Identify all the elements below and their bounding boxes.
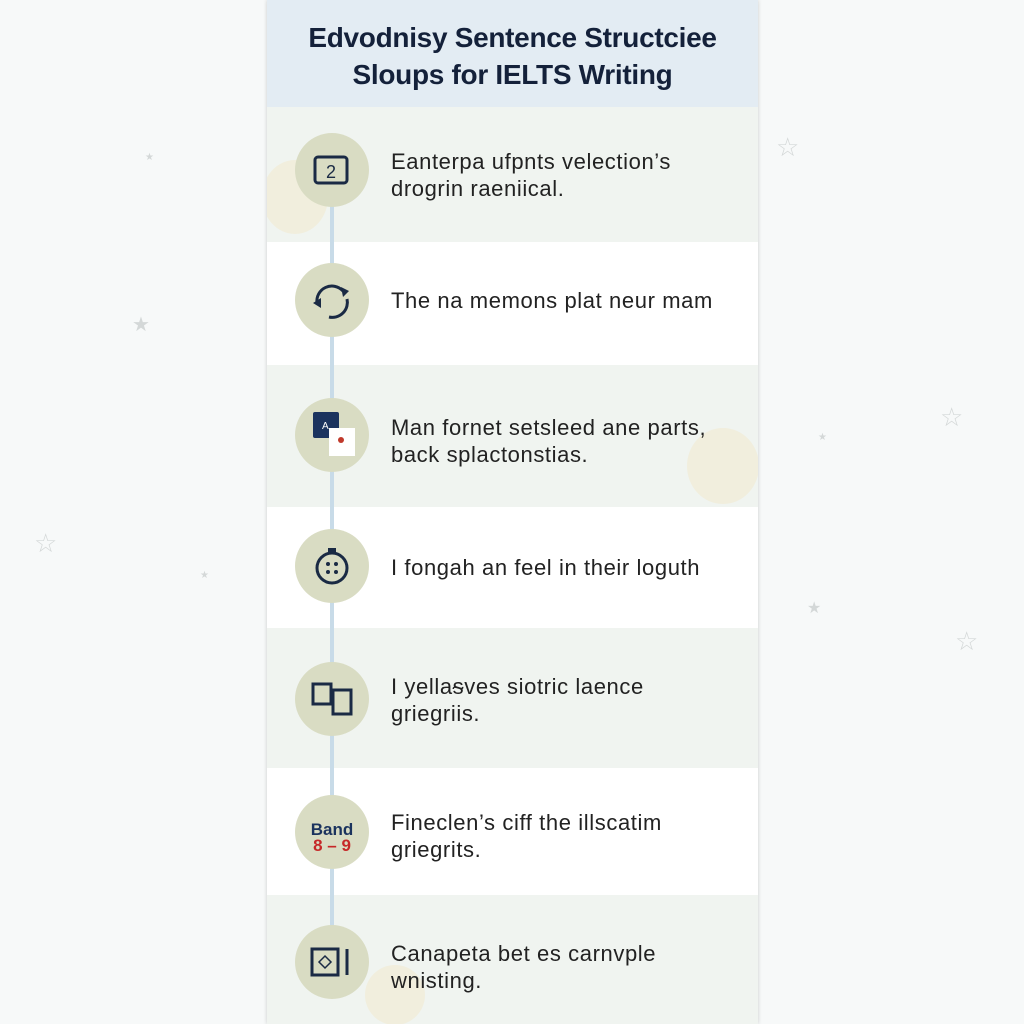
text: ☆ bbox=[940, 402, 963, 432]
text: ☆ bbox=[34, 528, 57, 558]
text 5: griegriis. bbox=[391, 701, 480, 726]
item 4 bbox=[295, 529, 700, 603]
text 6: Fineclen’s ciff the illscatim bbox=[391, 810, 662, 835]
text 6: griegrits. bbox=[391, 837, 481, 862]
text: ★ bbox=[807, 600, 821, 617]
icon: band 8-9: Band bbox=[311, 820, 353, 839]
item 5 bbox=[295, 662, 644, 736]
text 3 bbox=[391, 415, 706, 467]
text 1: drogrin raeniical. bbox=[391, 176, 564, 201]
text 1 bbox=[391, 149, 671, 201]
item 6 bbox=[295, 795, 662, 869]
text 7: wnisting. bbox=[391, 968, 482, 993]
text: ★ bbox=[200, 570, 209, 581]
icon: stopwatch bbox=[295, 529, 369, 603]
text 1: Eanterpa ufpnts velection’s bbox=[391, 149, 671, 174]
text 7 bbox=[391, 941, 656, 993]
title: Edvodnisy Sentence Structciee bbox=[308, 22, 717, 53]
icon: framed symbol bbox=[295, 925, 369, 999]
icon: numbered card: 2 bbox=[326, 162, 336, 182]
icon: two windows bbox=[295, 662, 369, 736]
item 2 bbox=[295, 263, 713, 337]
icon: numbered card bbox=[295, 133, 369, 207]
infographic card bbox=[267, 0, 758, 1024]
icon: letter cards bbox=[295, 398, 369, 472]
text 2: The na memons plat neur mam bbox=[391, 288, 713, 313]
text 5 bbox=[391, 674, 644, 726]
icon: cycle arrows bbox=[295, 263, 369, 337]
item 3 bbox=[295, 398, 706, 472]
text 7: Canapeta bet es carnvple bbox=[391, 941, 656, 966]
text 6 bbox=[391, 810, 662, 862]
text 5: I yellaᵴves siotric laence bbox=[391, 674, 644, 699]
timeline line bbox=[330, 180, 334, 970]
text: ★ bbox=[818, 432, 827, 443]
title: Sloups for IELTS Writing bbox=[353, 59, 672, 90]
decorative stars: ☆ bbox=[776, 132, 799, 162]
text 3: back splactonstias. bbox=[391, 442, 588, 467]
icon: letter cards: A bbox=[322, 421, 329, 432]
text: ★ bbox=[145, 152, 154, 163]
item 1 bbox=[295, 133, 671, 207]
text 4: I fongah an feel in their loguth bbox=[391, 555, 700, 580]
icon: band 8-9 bbox=[295, 795, 369, 869]
text: ☆ bbox=[955, 626, 978, 656]
text: ★ bbox=[132, 314, 150, 336]
item 7 bbox=[295, 925, 656, 999]
title bbox=[267, 0, 758, 107]
text 3: Man fornet setsleed ane parts, bbox=[391, 415, 706, 440]
icon: band 8-9: 8 – 9 bbox=[313, 836, 351, 855]
